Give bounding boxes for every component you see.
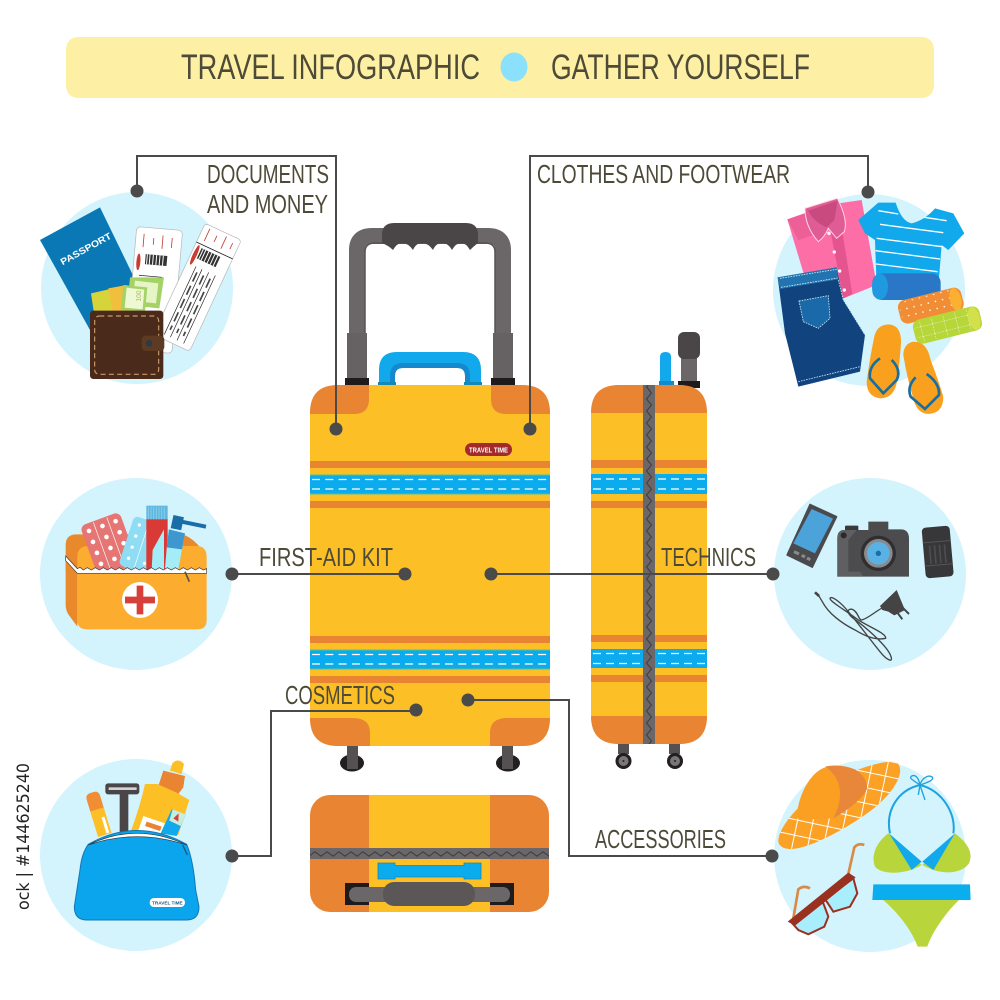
yellow bottle (131, 760, 189, 835)
front ticket (153, 223, 241, 351)
icon: clothes and footwear (778, 198, 984, 414)
smartphone (787, 504, 837, 567)
banknote value: 100 (136, 290, 143, 302)
passport (40, 207, 145, 330)
wallet (90, 311, 164, 379)
suitcase side view (591, 332, 707, 769)
label: documents and money (207, 159, 329, 219)
side wheels (616, 743, 683, 769)
back ticket (126, 227, 183, 353)
icon: first-aid kit (66, 506, 207, 629)
pouch label: TRAVEL TIME (152, 900, 183, 906)
icon: accessories (778, 762, 971, 947)
rolled blue towel (872, 273, 941, 300)
orange rolled towel (896, 286, 965, 325)
top view zipper (310, 848, 549, 859)
bag back (66, 534, 207, 570)
label: documents and money: DOCUMENTS (207, 159, 329, 189)
label: documents and money: AND MONEY (207, 189, 328, 219)
stripes lower (310, 636, 550, 683)
wheels (340, 745, 520, 772)
flip-flops (867, 324, 943, 414)
charger and cable (815, 590, 909, 660)
label: first-aid kit: FIRST-AID KIT (259, 542, 393, 572)
green rolled towel (911, 305, 984, 345)
denim shorts (778, 267, 865, 387)
side handles (659, 332, 700, 388)
medical cross (122, 582, 158, 618)
telescopic handle (345, 223, 515, 386)
title left: TRAVEL INFOGRAPHIC (181, 48, 480, 87)
travel time badge: TRAVEL TIME (469, 448, 508, 454)
throat spray (165, 515, 206, 569)
straw hat (778, 762, 900, 849)
header banner (66, 37, 934, 98)
top view blue handle (378, 863, 481, 879)
labels (207, 159, 790, 854)
stock watermark: ock | #144625240 (14, 763, 34, 910)
icon: documents and money (40, 207, 241, 379)
top carry handle (378, 352, 482, 385)
blue blister pack (118, 516, 165, 575)
label: technics: TECHNICS (661, 542, 756, 572)
sunglasses (788, 844, 864, 934)
suitcase top view (310, 795, 549, 912)
cards and banknotes (91, 277, 164, 320)
pink shirt (787, 198, 877, 300)
icon circle backgrounds (40, 192, 966, 952)
suitcase front view (310, 223, 550, 772)
side body (591, 385, 707, 744)
icon: technics (787, 504, 954, 660)
connector lines (137, 156, 868, 856)
label: clothes and footwear: CLOTHES AND FOOTWEAR (537, 159, 790, 189)
orange tube (85, 791, 111, 837)
bikini bottom (872, 884, 971, 947)
connector dots (130, 184, 874, 862)
blue striped t-shirt (858, 203, 964, 287)
bag front (66, 556, 207, 629)
bikini top (874, 776, 971, 873)
razor (105, 783, 139, 833)
red tube (146, 506, 168, 571)
label: cosmetics: COSMETICS (285, 680, 395, 710)
label: accessories: ACCESSORIES (595, 824, 726, 854)
small blue tube (161, 809, 186, 836)
camera lens (922, 526, 954, 578)
side zipper (643, 385, 655, 744)
title dot (500, 52, 528, 82)
pouch (74, 830, 199, 920)
pouch label (150, 898, 185, 907)
stripes upper (310, 461, 550, 508)
top view grey handle (345, 882, 514, 906)
corner protectors (310, 385, 550, 746)
case body (310, 385, 550, 746)
passport: PASSPORT (59, 231, 113, 267)
red blister pack (80, 512, 138, 578)
title right: GATHER YOURSELF (551, 48, 810, 87)
travel time badge (465, 443, 512, 456)
camera (837, 522, 909, 577)
icon: cosmetics (74, 760, 199, 920)
